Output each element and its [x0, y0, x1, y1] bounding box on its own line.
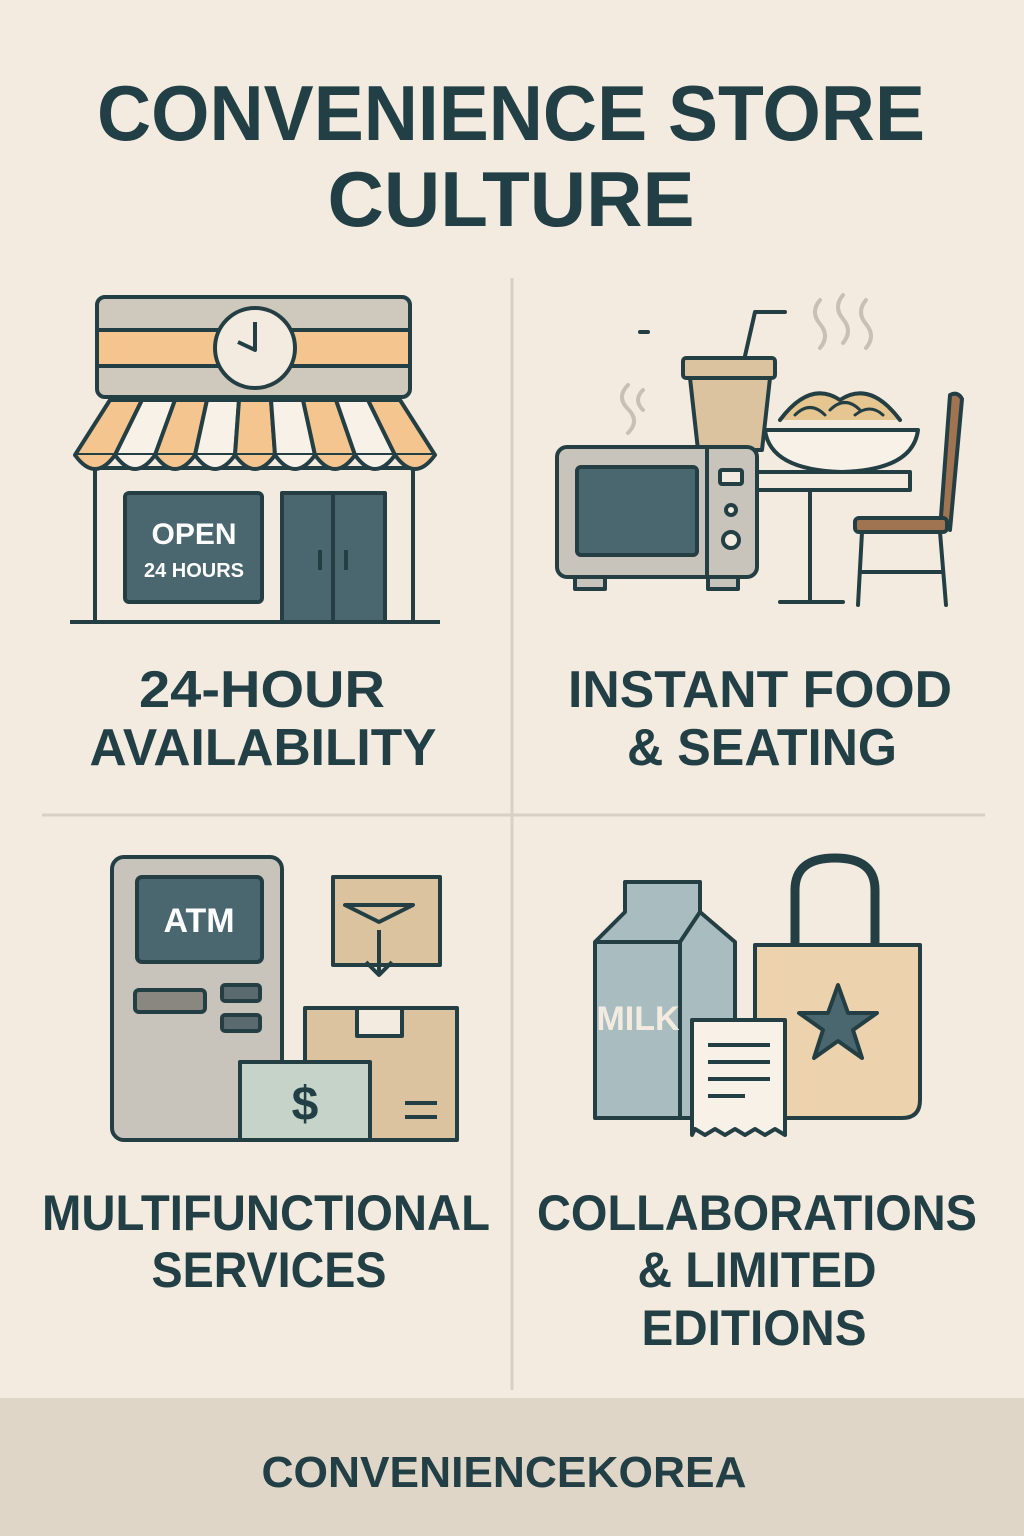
- label: multifunctional services: SERVICES: [152, 1242, 386, 1298]
- panel: collaborations & limited editions: [537, 858, 977, 1356]
- label: 24-hour availability: [90, 661, 436, 777]
- panel: multifunctional services: [42, 857, 490, 1298]
- label: 24-hour availability: AVAILABILITY: [90, 719, 436, 777]
- label: instant food & seating: INSTANT FOOD: [568, 661, 952, 719]
- title: CONVENIENCE STORE: [97, 69, 925, 157]
- icon: store: OPEN: [151, 518, 237, 551]
- icon: ATM, parcel, cash: [112, 857, 457, 1140]
- label: multifunctional services: [42, 1185, 490, 1298]
- footer: CONVENIENCEKOREA: [262, 1448, 746, 1497]
- icon: food and seating: [557, 295, 962, 605]
- label: collaborations & limited editions: [537, 1185, 977, 1356]
- icon: store: 24 HOURS: [144, 560, 244, 582]
- icon: ATM, parcel, cash: ATM: [163, 902, 235, 940]
- label: collaborations & limited editions: EDITIONS: [642, 1300, 866, 1356]
- icon: milk, receipt, bag: MILK: [596, 1000, 680, 1038]
- icon: store: [70, 297, 440, 622]
- panel: instant food & seating: [557, 295, 962, 777]
- label: instant food & seating: & SEATING: [627, 719, 897, 777]
- label: collaborations & limited editions: COLLABORATIONS: [537, 1185, 977, 1241]
- panel: 24-hour availability: [70, 297, 440, 777]
- label: multifunctional services: MULTIFUNCTIONAL: [42, 1185, 490, 1241]
- title: CULTURE: [328, 155, 694, 243]
- icon: milk, receipt, bag: [595, 858, 920, 1135]
- icon: ATM, parcel, cash: $: [292, 1078, 319, 1131]
- label: instant food & seating: [568, 661, 952, 777]
- footer: [0, 1398, 1024, 1536]
- label: collaborations & limited editions: & LIMITED: [638, 1242, 876, 1298]
- label: 24-hour availability: 24-HOUR: [139, 661, 385, 719]
- title: [97, 69, 925, 243]
